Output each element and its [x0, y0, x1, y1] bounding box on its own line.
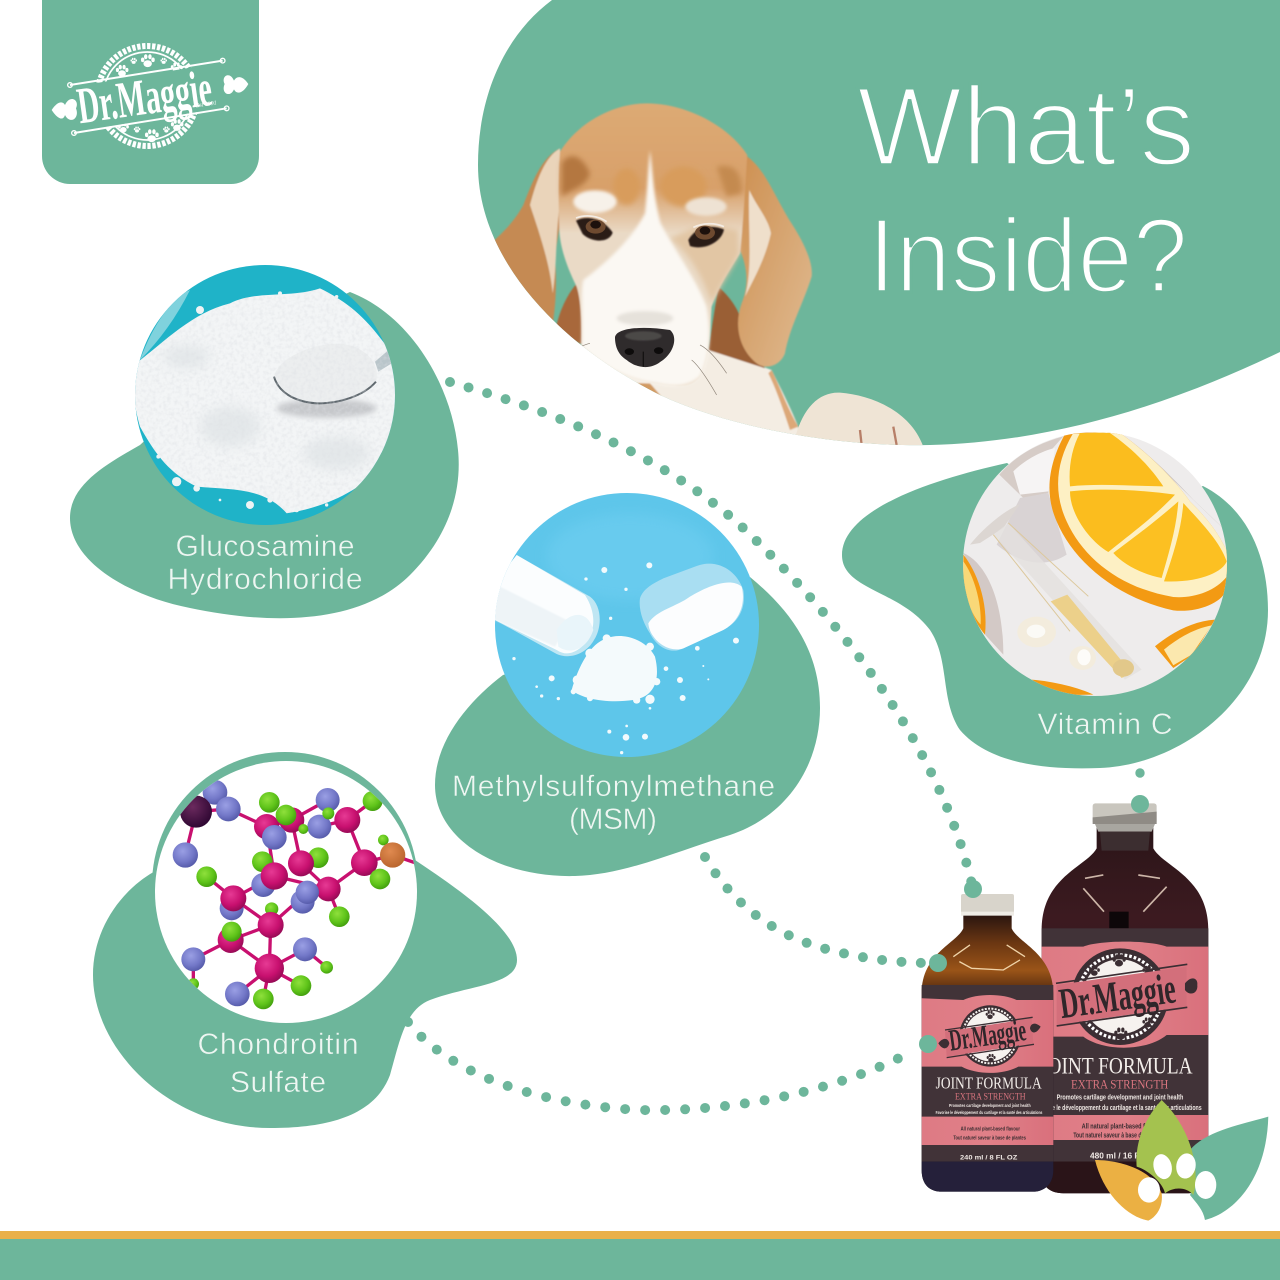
dog nose	[572, 328, 727, 395]
left capsule	[492, 555, 600, 656]
dotted connector: glucosamine to small bottle	[450, 382, 973, 889]
panel: vitamin C	[842, 428, 1268, 768]
label: glucosamine	[168, 530, 362, 596]
connector endpoints	[919, 795, 1149, 1053]
bottle: small 240 ml: All natural plant-based flavour	[961, 1127, 1020, 1133]
dog paw	[790, 393, 923, 447]
bottle: small 240 ml: Promotes cartilage development and joint health	[949, 1103, 1031, 1109]
label: chondroitin	[198, 1028, 358, 1099]
panel: chondroitin	[93, 752, 517, 1128]
bottle: small 240 ml: JOINT FORMULA	[936, 1073, 1042, 1092]
dog fur markings	[562, 150, 742, 386]
chart: molecule model	[173, 780, 417, 1009]
bottle: large 480 ml: JOINT FORMULA	[1040, 1053, 1193, 1079]
dog eyes	[576, 216, 724, 247]
label: chondroitin: Sulfate	[230, 1066, 326, 1099]
powder shading	[163, 345, 370, 470]
powder pile	[572, 636, 657, 701]
dotted connector: vitamin C to large bottle	[1135, 768, 1145, 778]
label: chondroitin: Chondroitin	[198, 1028, 358, 1061]
panel: MSM	[435, 490, 820, 876]
bottle: small 240 ml: Tout naturel saveur à base de plantes	[953, 1135, 1026, 1141]
footer bar	[0, 1231, 1280, 1280]
title: What’s	[857, 64, 1195, 189]
bottle: small 240 ml	[922, 894, 1053, 1192]
bottle: large 480 ml: Dr.Maggie	[1056, 964, 1179, 1028]
photo: glucosamine powder	[130, 260, 403, 530]
illustration: beagle dog	[492, 103, 923, 450]
dropper	[970, 506, 1016, 544]
dotted connector: MSM to small bottle	[705, 857, 925, 963]
label: MSM: (MSM)	[569, 803, 657, 836]
photo: MSM capsules	[490, 490, 765, 765]
bottle: large 480 ml	[1033, 803, 1208, 1193]
right capsule	[640, 564, 744, 651]
title line 2: Inside?	[868, 197, 1188, 315]
label: glucosamine: Hydrochloride	[168, 563, 362, 596]
bottle: large 480 ml: Promotes cartilage development and joint health	[1057, 1092, 1184, 1101]
orange slice	[1049, 431, 1232, 611]
bottle: small 240 ml: 240 ml / 8 FL OZ	[960, 1154, 1017, 1161]
bottle: small 240 ml: EXTRA STRENGTH	[955, 1091, 1026, 1101]
bottle: large 480 ml: Tout naturel saveur à base de plantes	[1073, 1132, 1163, 1139]
label: glucosamine: Glucosamine	[176, 530, 354, 563]
panel: header blob	[478, 0, 1280, 450]
bottle: small 240 ml: Dr.Maggie	[947, 1013, 1028, 1058]
logo: Dr. Maggie	[52, 46, 248, 146]
bottle: small 240 ml: Favorise le développement du cartilage et la santé des articulations	[936, 1110, 1042, 1116]
logo panel	[42, 0, 259, 184]
small orange pieces	[963, 555, 986, 635]
label: MSM: Methylsulfonylmethane	[452, 770, 775, 803]
bottle: large 480 ml: 480 ml / 16 FL OZ	[1090, 1151, 1158, 1160]
dotted connector: chondroitin to small bottle	[408, 1022, 915, 1110]
logo: Dr. Maggie: Est 1991	[194, 100, 217, 109]
label: MSM	[452, 770, 775, 836]
bottle: large 480 ml: EXTRA STRENGTH	[1071, 1077, 1168, 1091]
bottle: large 480 ml: Favorise le développement du cartilage et la santé des articulations	[1033, 1103, 1202, 1112]
label: vitamin C: Vitamin C	[1038, 708, 1172, 741]
logo: Dr. Maggie: Dr.Maggie	[74, 60, 215, 135]
panel: glucosamine	[70, 260, 459, 618]
icon: leaves with paw	[1095, 1100, 1268, 1221]
photo: vitamin C orange and ampoule	[960, 428, 1235, 703]
bottle: large 480 ml: All natural plant-based flavour	[1082, 1124, 1162, 1131]
